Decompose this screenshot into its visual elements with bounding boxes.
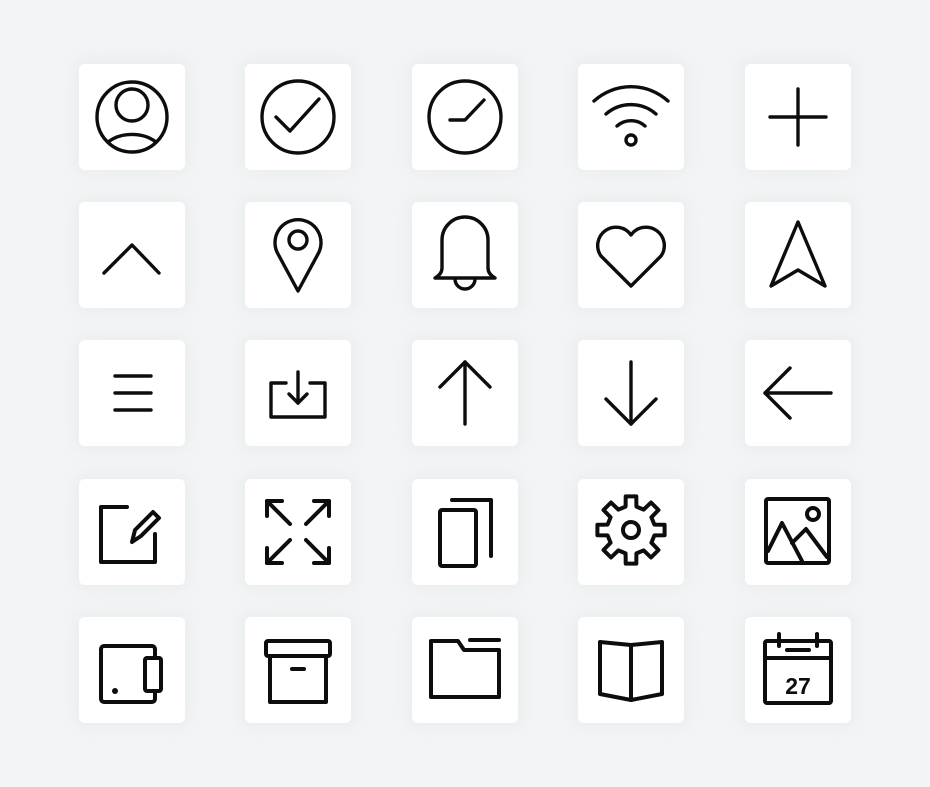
icon: arrow up [412,340,518,446]
icon: archive box [245,617,351,723]
icon: calendar [745,617,851,723]
icon: clock [412,64,518,170]
icon: location pin [245,202,351,308]
icon: arrow left [745,340,851,446]
icon: navigation [745,202,851,308]
icon: bell [412,202,518,308]
icon: wifi [578,64,684,170]
icon: download tray [245,340,351,446]
icon: user [79,64,185,170]
icon: arrow down [578,340,684,446]
icon: plus [745,64,851,170]
icon: calendar: 27 [785,673,811,699]
icon: gear [578,479,684,585]
icon: expand [245,479,351,585]
icon: wallet [79,617,185,723]
icon: heart [578,202,684,308]
icon: folder [412,617,518,723]
icon: image [745,479,851,585]
icon: check [245,64,351,170]
icon: chevron up [79,202,185,308]
icon: menu [79,340,185,446]
icon: edit [79,479,185,585]
icon: open book [578,617,684,723]
icon: copy [412,479,518,585]
